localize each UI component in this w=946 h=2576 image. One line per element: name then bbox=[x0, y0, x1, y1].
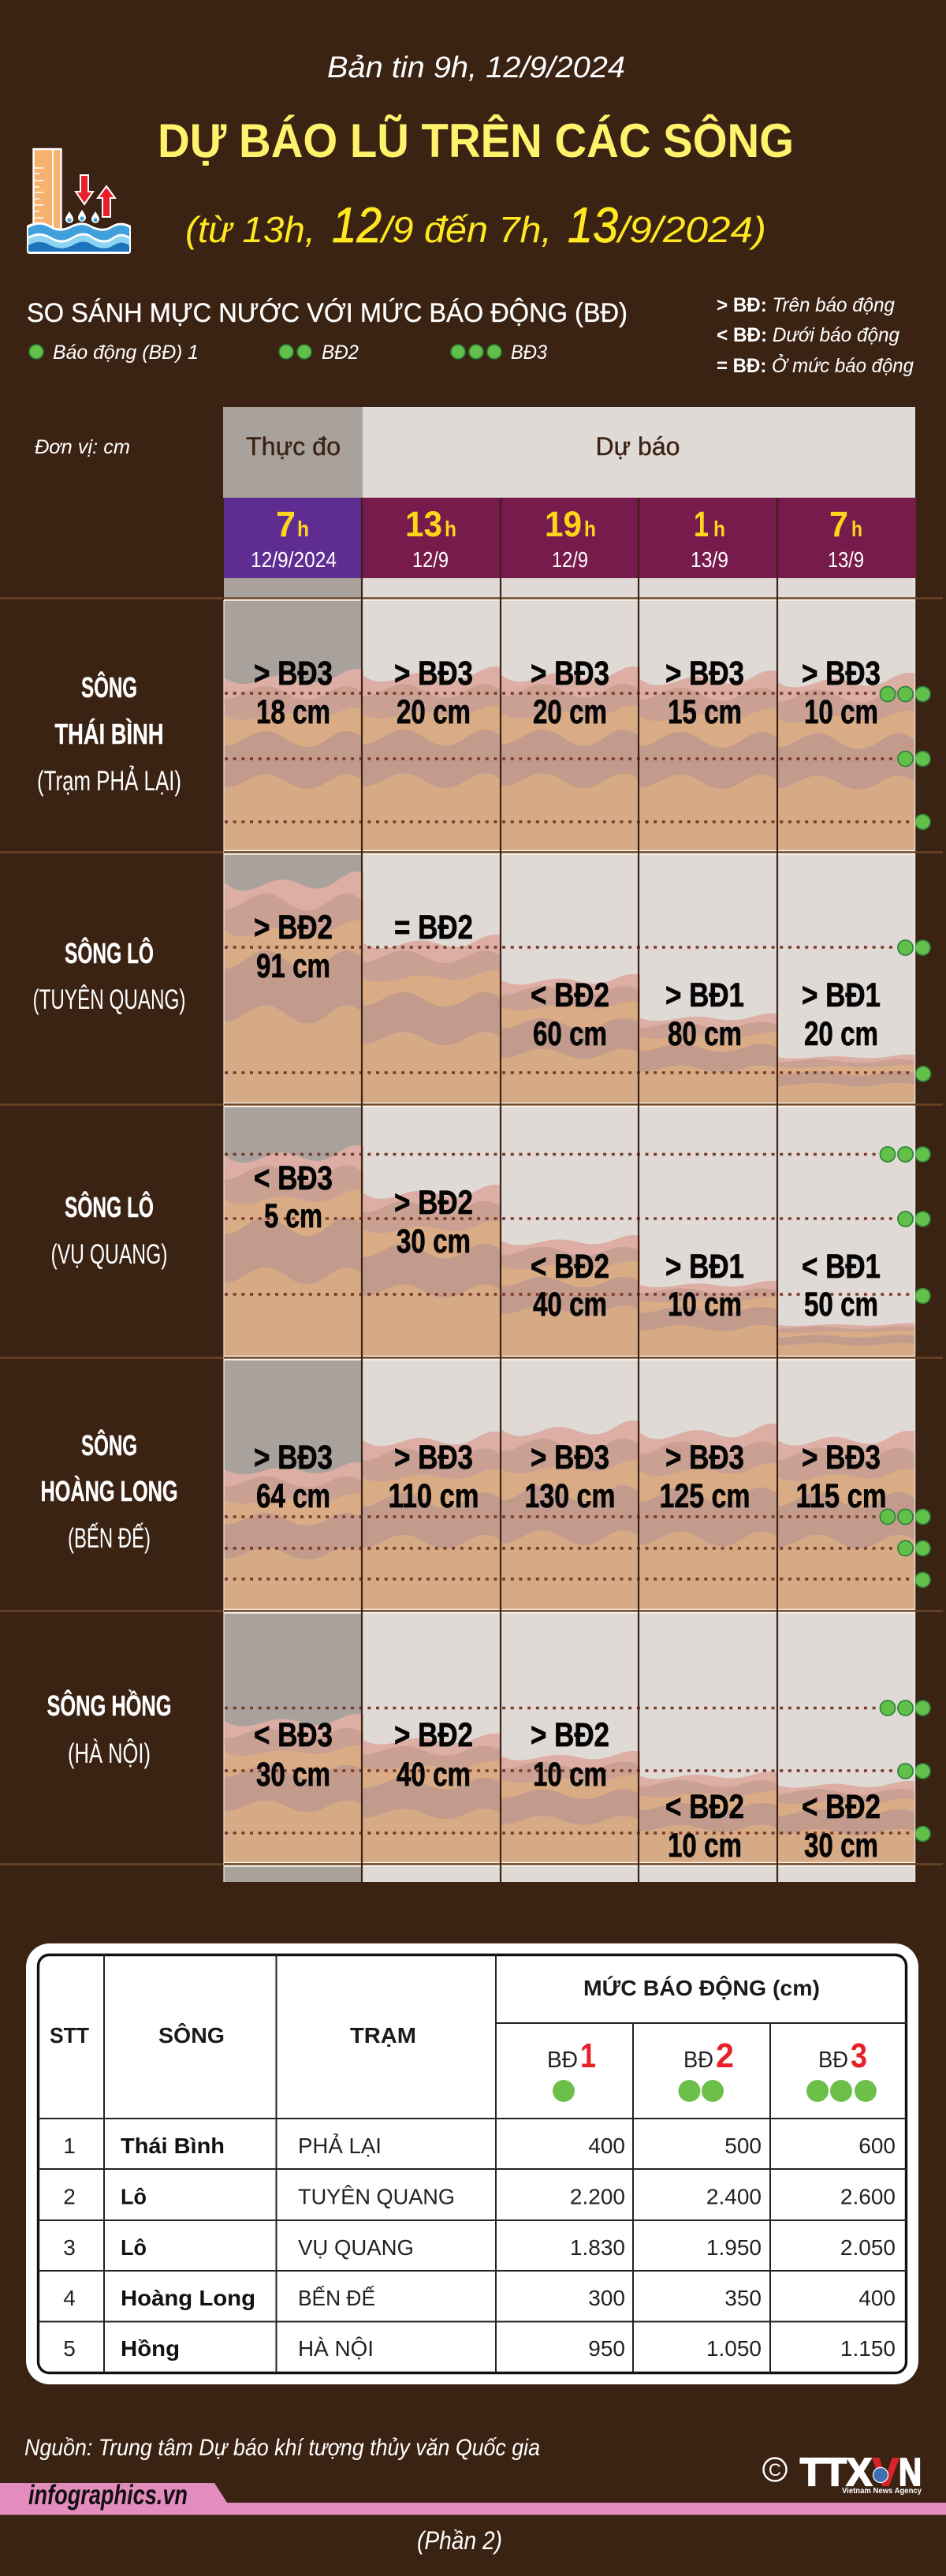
river label row 1 bbox=[37, 670, 181, 797]
values row 2: = BĐ2 bbox=[394, 909, 473, 946]
values row 1: 18 cm bbox=[256, 693, 330, 731]
legend: alert level dots: BĐ3 bbox=[511, 342, 547, 364]
part label: (Phần 2) bbox=[417, 2526, 502, 2555]
table row 3 bbox=[63, 2235, 896, 2260]
table row 1: 600 bbox=[858, 2134, 896, 2158]
table row 1: 1 bbox=[63, 2134, 76, 2158]
table header: 2 bbox=[716, 2037, 734, 2075]
legend: comparison symbols: > BĐ: Trên báo động bbox=[717, 294, 895, 316]
table row 1 bbox=[63, 2133, 896, 2158]
values row 3: < BĐ3 bbox=[254, 1159, 333, 1197]
alert lines row 5 bbox=[225, 1701, 930, 1842]
panel: Lô (Vụ Quang) bbox=[50, 1145, 930, 1357]
logo: TTXVN: N bbox=[899, 2451, 922, 2494]
table row 4: 4 bbox=[63, 2286, 76, 2310]
panel: time row: 12/9/2024 bbox=[251, 547, 337, 572]
table row 3: 2.050 bbox=[840, 2235, 896, 2260]
values row 5: 30 cm bbox=[256, 1756, 330, 1794]
values row 5: > BĐ2 bbox=[394, 1716, 473, 1754]
panel: time row: 13/9 bbox=[828, 547, 864, 572]
footer band: infographics.vn: infographics.vn bbox=[28, 2480, 188, 2511]
panel: time row: 19 bbox=[545, 504, 582, 544]
values row 3: > BĐ2 bbox=[394, 1184, 473, 1222]
legend: comparison symbols: < BĐ: Dưới báo động bbox=[717, 324, 899, 346]
values row 5: 40 cm bbox=[397, 1756, 471, 1794]
values row 2: 80 cm bbox=[668, 1015, 742, 1053]
footer band: infographics.vn bbox=[0, 2480, 946, 2514]
values row 1: 20 cm bbox=[533, 693, 607, 731]
icon: water gauge with arrows and drops bbox=[27, 149, 131, 254]
table row 2: 2.400 bbox=[706, 2185, 762, 2208]
values row 5: > BĐ2 bbox=[531, 1716, 609, 1754]
logo: TTXVN bbox=[763, 2451, 922, 2496]
values row 1 bbox=[254, 655, 881, 731]
values row 3: 5 cm bbox=[264, 1197, 322, 1235]
values row 3: > BĐ1 bbox=[665, 1248, 744, 1286]
values row 5 bbox=[254, 1716, 881, 1865]
wave levels row 4 bbox=[225, 1421, 915, 1611]
table header bbox=[50, 1975, 877, 2102]
subtitle: forecast period: /9/2024) bbox=[616, 209, 766, 250]
river label row 1: SÔNG bbox=[81, 670, 137, 704]
values row 2: < BĐ2 bbox=[531, 976, 609, 1014]
subtitle: forecast period: 13 bbox=[568, 198, 618, 253]
values row 2: 91 cm bbox=[256, 947, 330, 985]
values row 2: > BĐ1 bbox=[802, 976, 881, 1014]
values row 5: < BĐ3 bbox=[254, 1716, 333, 1754]
values row 1: > BĐ3 bbox=[531, 655, 609, 693]
table row 3: 1.830 bbox=[570, 2235, 625, 2260]
values row 3: 40 cm bbox=[533, 1286, 607, 1323]
values row 2: 20 cm bbox=[804, 1015, 878, 1053]
values row 4: 130 cm bbox=[525, 1477, 615, 1515]
subtitle: forecast period: 12 bbox=[332, 198, 382, 253]
panel: time row: h bbox=[851, 517, 862, 541]
wave levels row 3 bbox=[225, 1145, 915, 1357]
table row 3: 3 bbox=[63, 2235, 76, 2260]
table header: TRẠM bbox=[350, 2023, 416, 2048]
table row 5: 1.050 bbox=[706, 2336, 762, 2361]
values row 4: 115 cm bbox=[796, 1477, 886, 1515]
logo: TTXVN: V bbox=[873, 2451, 899, 2494]
table row 4: 350 bbox=[724, 2286, 762, 2310]
wave levels row 2 bbox=[225, 872, 915, 1103]
river label row 3 bbox=[50, 1190, 167, 1270]
table row 2: 2.200 bbox=[570, 2185, 625, 2208]
values row 3: 10 cm bbox=[668, 1286, 742, 1323]
table row 2 bbox=[63, 2185, 896, 2208]
panel: time row: 1 bbox=[694, 504, 709, 544]
bulletin date: Bản tin 9h, 12/9/2024 bbox=[327, 51, 625, 84]
values row 3: < BĐ2 bbox=[531, 1248, 609, 1286]
panel: column headers bbox=[223, 407, 915, 498]
values row 2 bbox=[254, 909, 881, 1053]
legend heading: SO SÁNH MỰC NƯỚC VỚI MỨC BÁO ĐỘNG (BĐ) bbox=[27, 298, 628, 328]
values row 1: 20 cm bbox=[397, 693, 471, 731]
wave levels row 5 bbox=[225, 1714, 915, 1864]
river label row 2: (TUYÊN QUANG) bbox=[33, 984, 186, 1015]
panel: time row: h bbox=[584, 517, 596, 541]
table header: BĐ bbox=[818, 2048, 848, 2073]
river label row 2: SÔNG LÔ bbox=[65, 936, 154, 969]
table row 4: BẾN ĐẾ bbox=[298, 2286, 375, 2310]
river label row 5: SÔNG HỒNG bbox=[47, 1689, 172, 1722]
subtitle: forecast period bbox=[185, 198, 766, 253]
panel: time row: h bbox=[297, 517, 309, 541]
river label row 1: (Trạm PHẢ LẠI) bbox=[37, 765, 181, 797]
values row 2: 60 cm bbox=[533, 1015, 607, 1053]
table row 2: 2 bbox=[63, 2185, 76, 2208]
values row 4: > BĐ3 bbox=[254, 1439, 333, 1477]
river label row 1: THÁI BÌNH bbox=[55, 718, 164, 750]
alert lines row 2 bbox=[225, 940, 931, 1081]
panel: time row: 12/9 bbox=[552, 547, 588, 572]
panel: column headers: Dự báo bbox=[596, 432, 680, 461]
table header: 3 bbox=[851, 2037, 867, 2075]
logo: TTXVN: Vietnam News Agency bbox=[842, 2486, 922, 2496]
alert lines row 4 bbox=[225, 1509, 930, 1588]
values row 1: > BĐ3 bbox=[394, 655, 473, 693]
panel: Hoàng Long (Bến Đế) bbox=[41, 1421, 930, 1611]
panel: Lô (Tuyên Quang) bbox=[33, 872, 931, 1103]
values row 4: > BĐ3 bbox=[531, 1439, 609, 1477]
table header: BĐ bbox=[547, 2048, 578, 2073]
river label row 5 bbox=[47, 1689, 172, 1769]
river label row 4: (BẾN ĐẾ) bbox=[68, 1522, 151, 1554]
values row 4: 64 cm bbox=[256, 1477, 330, 1515]
panel: time row bbox=[224, 498, 916, 578]
river label row 4: HOÀNG LONG bbox=[41, 1475, 178, 1507]
table header: STT bbox=[50, 2023, 89, 2048]
values row 3: 30 cm bbox=[397, 1223, 471, 1260]
panel: Thái Bình (Phả Lại) bbox=[37, 655, 930, 852]
panel: alert level table bbox=[26, 1943, 918, 2384]
values row 2: > BĐ2 bbox=[254, 909, 333, 946]
values row 4: 110 cm bbox=[388, 1477, 479, 1515]
logo: TTXVN: TTX bbox=[800, 2451, 872, 2494]
table row 2: TUYÊN QUANG bbox=[298, 2185, 455, 2208]
table row 1: Thái Bình bbox=[121, 2134, 225, 2158]
values row 5: 30 cm bbox=[804, 1827, 878, 1865]
table header: 1 bbox=[580, 2037, 596, 2075]
panel: time row: h bbox=[713, 517, 725, 541]
table row 5: 950 bbox=[588, 2336, 625, 2361]
values row 2: > BĐ1 bbox=[665, 976, 744, 1014]
table row 1: PHẢ LẠI bbox=[298, 2133, 382, 2158]
river label row 5: (HÀ NỘI) bbox=[68, 1738, 151, 1769]
table header: BĐ bbox=[683, 2048, 713, 2073]
values row 4: 125 cm bbox=[659, 1477, 750, 1515]
table row 5: 1.150 bbox=[840, 2336, 896, 2361]
legend: alert level dots: BĐ2 bbox=[322, 342, 359, 364]
values row 4: > BĐ3 bbox=[394, 1439, 473, 1477]
values row 1: > BĐ3 bbox=[254, 655, 333, 693]
values row 1: 10 cm bbox=[804, 693, 878, 731]
title: DỰ BÁO LŨ TRÊN CÁC SÔNG bbox=[158, 114, 794, 167]
legend: comparison symbols bbox=[717, 294, 914, 377]
legend: alert level dots bbox=[29, 342, 547, 364]
panel: time row: 13/9 bbox=[691, 547, 728, 572]
table row 5: HÀ NỘI bbox=[298, 2336, 374, 2361]
table row 5: 5 bbox=[63, 2336, 76, 2361]
values row 4 bbox=[254, 1439, 886, 1515]
unit note: Đơn vị: cm bbox=[35, 436, 130, 458]
values row 3: 50 cm bbox=[804, 1286, 878, 1323]
values row 5: < BĐ2 bbox=[802, 1788, 881, 1826]
river label row 2 bbox=[33, 936, 186, 1015]
values row 5: < BĐ2 bbox=[665, 1788, 744, 1826]
values row 4: > BĐ3 bbox=[665, 1439, 744, 1477]
table row 4 bbox=[63, 2286, 896, 2310]
values row 1: 15 cm bbox=[668, 693, 742, 731]
logo: TTXVN: C bbox=[769, 2460, 781, 2480]
river label row 3: (VỤ QUANG) bbox=[50, 1239, 167, 1270]
values row 4: > BĐ3 bbox=[802, 1439, 881, 1477]
panel: time row: 12/9 bbox=[412, 547, 449, 572]
table row 3: 1.950 bbox=[706, 2235, 762, 2260]
table header: MỨC BÁO ĐỘNG (cm) bbox=[583, 1975, 820, 2000]
table row 5 bbox=[63, 2336, 896, 2361]
river label row 4 bbox=[41, 1428, 178, 1554]
table row 1: 500 bbox=[724, 2134, 762, 2158]
values row 3: < BĐ1 bbox=[802, 1248, 881, 1286]
subtitle: forecast period: /9 đến 7h, bbox=[379, 209, 552, 250]
subtitle: forecast period: (từ 13h, bbox=[185, 209, 315, 250]
river label row 3: SÔNG LÔ bbox=[65, 1190, 154, 1223]
alert lines row 3 bbox=[225, 1147, 930, 1304]
table row 3: VỤ QUANG bbox=[298, 2235, 414, 2260]
values row 1: > BĐ3 bbox=[802, 655, 881, 693]
values row 5: 10 cm bbox=[668, 1827, 742, 1865]
values row 3 bbox=[254, 1159, 881, 1323]
values row 1: > BĐ3 bbox=[665, 655, 744, 693]
table row 1: 400 bbox=[588, 2134, 625, 2158]
panel: column headers: Thực đo bbox=[246, 432, 341, 461]
table row 2: Lô bbox=[121, 2185, 147, 2208]
panel: time row: 7 bbox=[276, 504, 296, 544]
table row 2: 2.600 bbox=[840, 2185, 896, 2208]
panel: time row: 13 bbox=[405, 504, 442, 544]
alert lines row 1 bbox=[225, 686, 930, 830]
legend: alert level dots: Báo động (BĐ) 1 bbox=[53, 342, 199, 364]
table row 4: 300 bbox=[588, 2286, 625, 2310]
panel: time row: 7 bbox=[829, 504, 848, 544]
legend: comparison symbols: = BĐ: Ở mức báo động bbox=[717, 353, 914, 377]
table row 5: Hồng bbox=[121, 2336, 180, 2361]
panel: Hồng (Hà Nội) bbox=[47, 1689, 930, 1865]
table header: SÔNG bbox=[158, 2022, 225, 2048]
table row 4: Hoàng Long bbox=[121, 2286, 255, 2310]
source note: Nguồn: Trung tâm Dự báo khí tượng thủy văn Quốc gia bbox=[24, 2435, 540, 2461]
river label row 4: SÔNG bbox=[81, 1428, 137, 1462]
panel: time row: h bbox=[445, 517, 456, 541]
values row 5: 10 cm bbox=[533, 1756, 607, 1794]
table row 3: Lô bbox=[121, 2235, 147, 2260]
wave levels row 1 bbox=[225, 666, 915, 852]
table row 4: 400 bbox=[858, 2286, 896, 2310]
